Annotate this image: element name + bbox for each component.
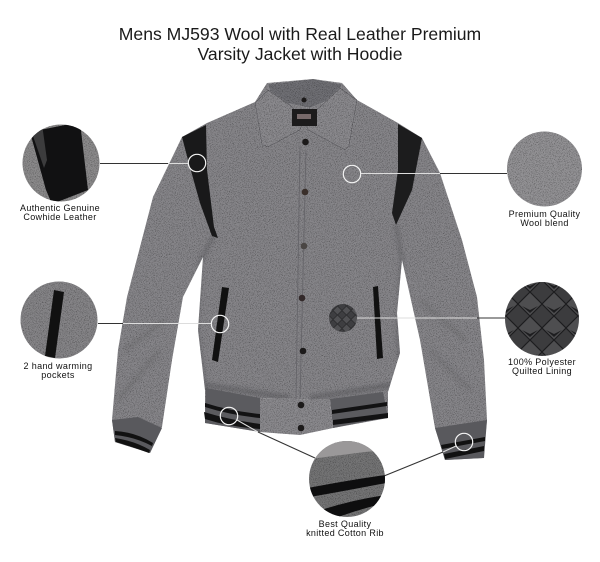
front tab — [260, 398, 333, 435]
left pocket — [212, 287, 229, 362]
caption: rib: Best Quality — [319, 519, 372, 529]
caption: lining: 100% Polyester — [508, 357, 576, 367]
title: Varsity Jacket with Hoodie — [197, 44, 403, 64]
caption: leather: Cowhide Leather — [23, 212, 97, 222]
waistband left — [204, 388, 260, 432]
detail circle: quilted lining — [504, 281, 580, 357]
left leather shoulder strip — [182, 125, 218, 238]
callout: lining — [504, 281, 580, 376]
connector: pocket — [98, 315, 229, 333]
front placket line — [296, 146, 306, 400]
right pocket — [373, 286, 383, 359]
caption: lining: Quilted Lining — [512, 366, 572, 376]
title — [119, 24, 481, 64]
title: Mens MJ593 Wool with Real Leather Premium — [119, 24, 481, 44]
callout: leather — [20, 122, 102, 222]
caption: pockets: 2 hand warming — [24, 361, 92, 371]
quilted lining patch — [329, 304, 357, 332]
inner collar — [268, 79, 342, 108]
right cuff — [435, 420, 487, 460]
detail circle: wool — [506, 131, 584, 209]
caption: rib: knitted Cotton Rib — [306, 528, 384, 538]
neck label — [292, 109, 317, 126]
callout: pockets — [19, 280, 99, 380]
jacket illustration — [112, 79, 487, 460]
callout: wool — [506, 131, 584, 228]
connector: leather — [100, 154, 206, 172]
waistband right — [330, 392, 388, 428]
caption: leather — [20, 203, 100, 222]
jacket wool body — [112, 79, 487, 460]
caption: lining — [508, 357, 576, 376]
connector: cuff rib — [384, 433, 473, 476]
caption: wool: Premium Quality — [509, 209, 581, 219]
caption: wool: Wool blend — [520, 218, 569, 228]
caption: leather: Authentic Genuine — [20, 203, 100, 213]
buttons — [298, 98, 309, 431]
detail circle: knitted rib — [308, 440, 386, 522]
caption: rib — [306, 519, 384, 538]
left cuff — [112, 417, 162, 453]
sleeve and body shading — [118, 225, 470, 400]
connector: waist rib — [220, 407, 315, 458]
connector: wool — [343, 165, 507, 183]
connector: lining — [357, 317, 505, 319]
caption: pockets — [24, 361, 92, 380]
detail circle: leather — [22, 124, 100, 202]
detail circle: pocket — [19, 280, 99, 360]
collar — [255, 88, 357, 150]
caption: wool — [509, 209, 581, 228]
caption: pockets: pockets — [41, 370, 75, 380]
right leather shoulder strip — [392, 124, 422, 225]
callout: rib — [306, 440, 386, 538]
